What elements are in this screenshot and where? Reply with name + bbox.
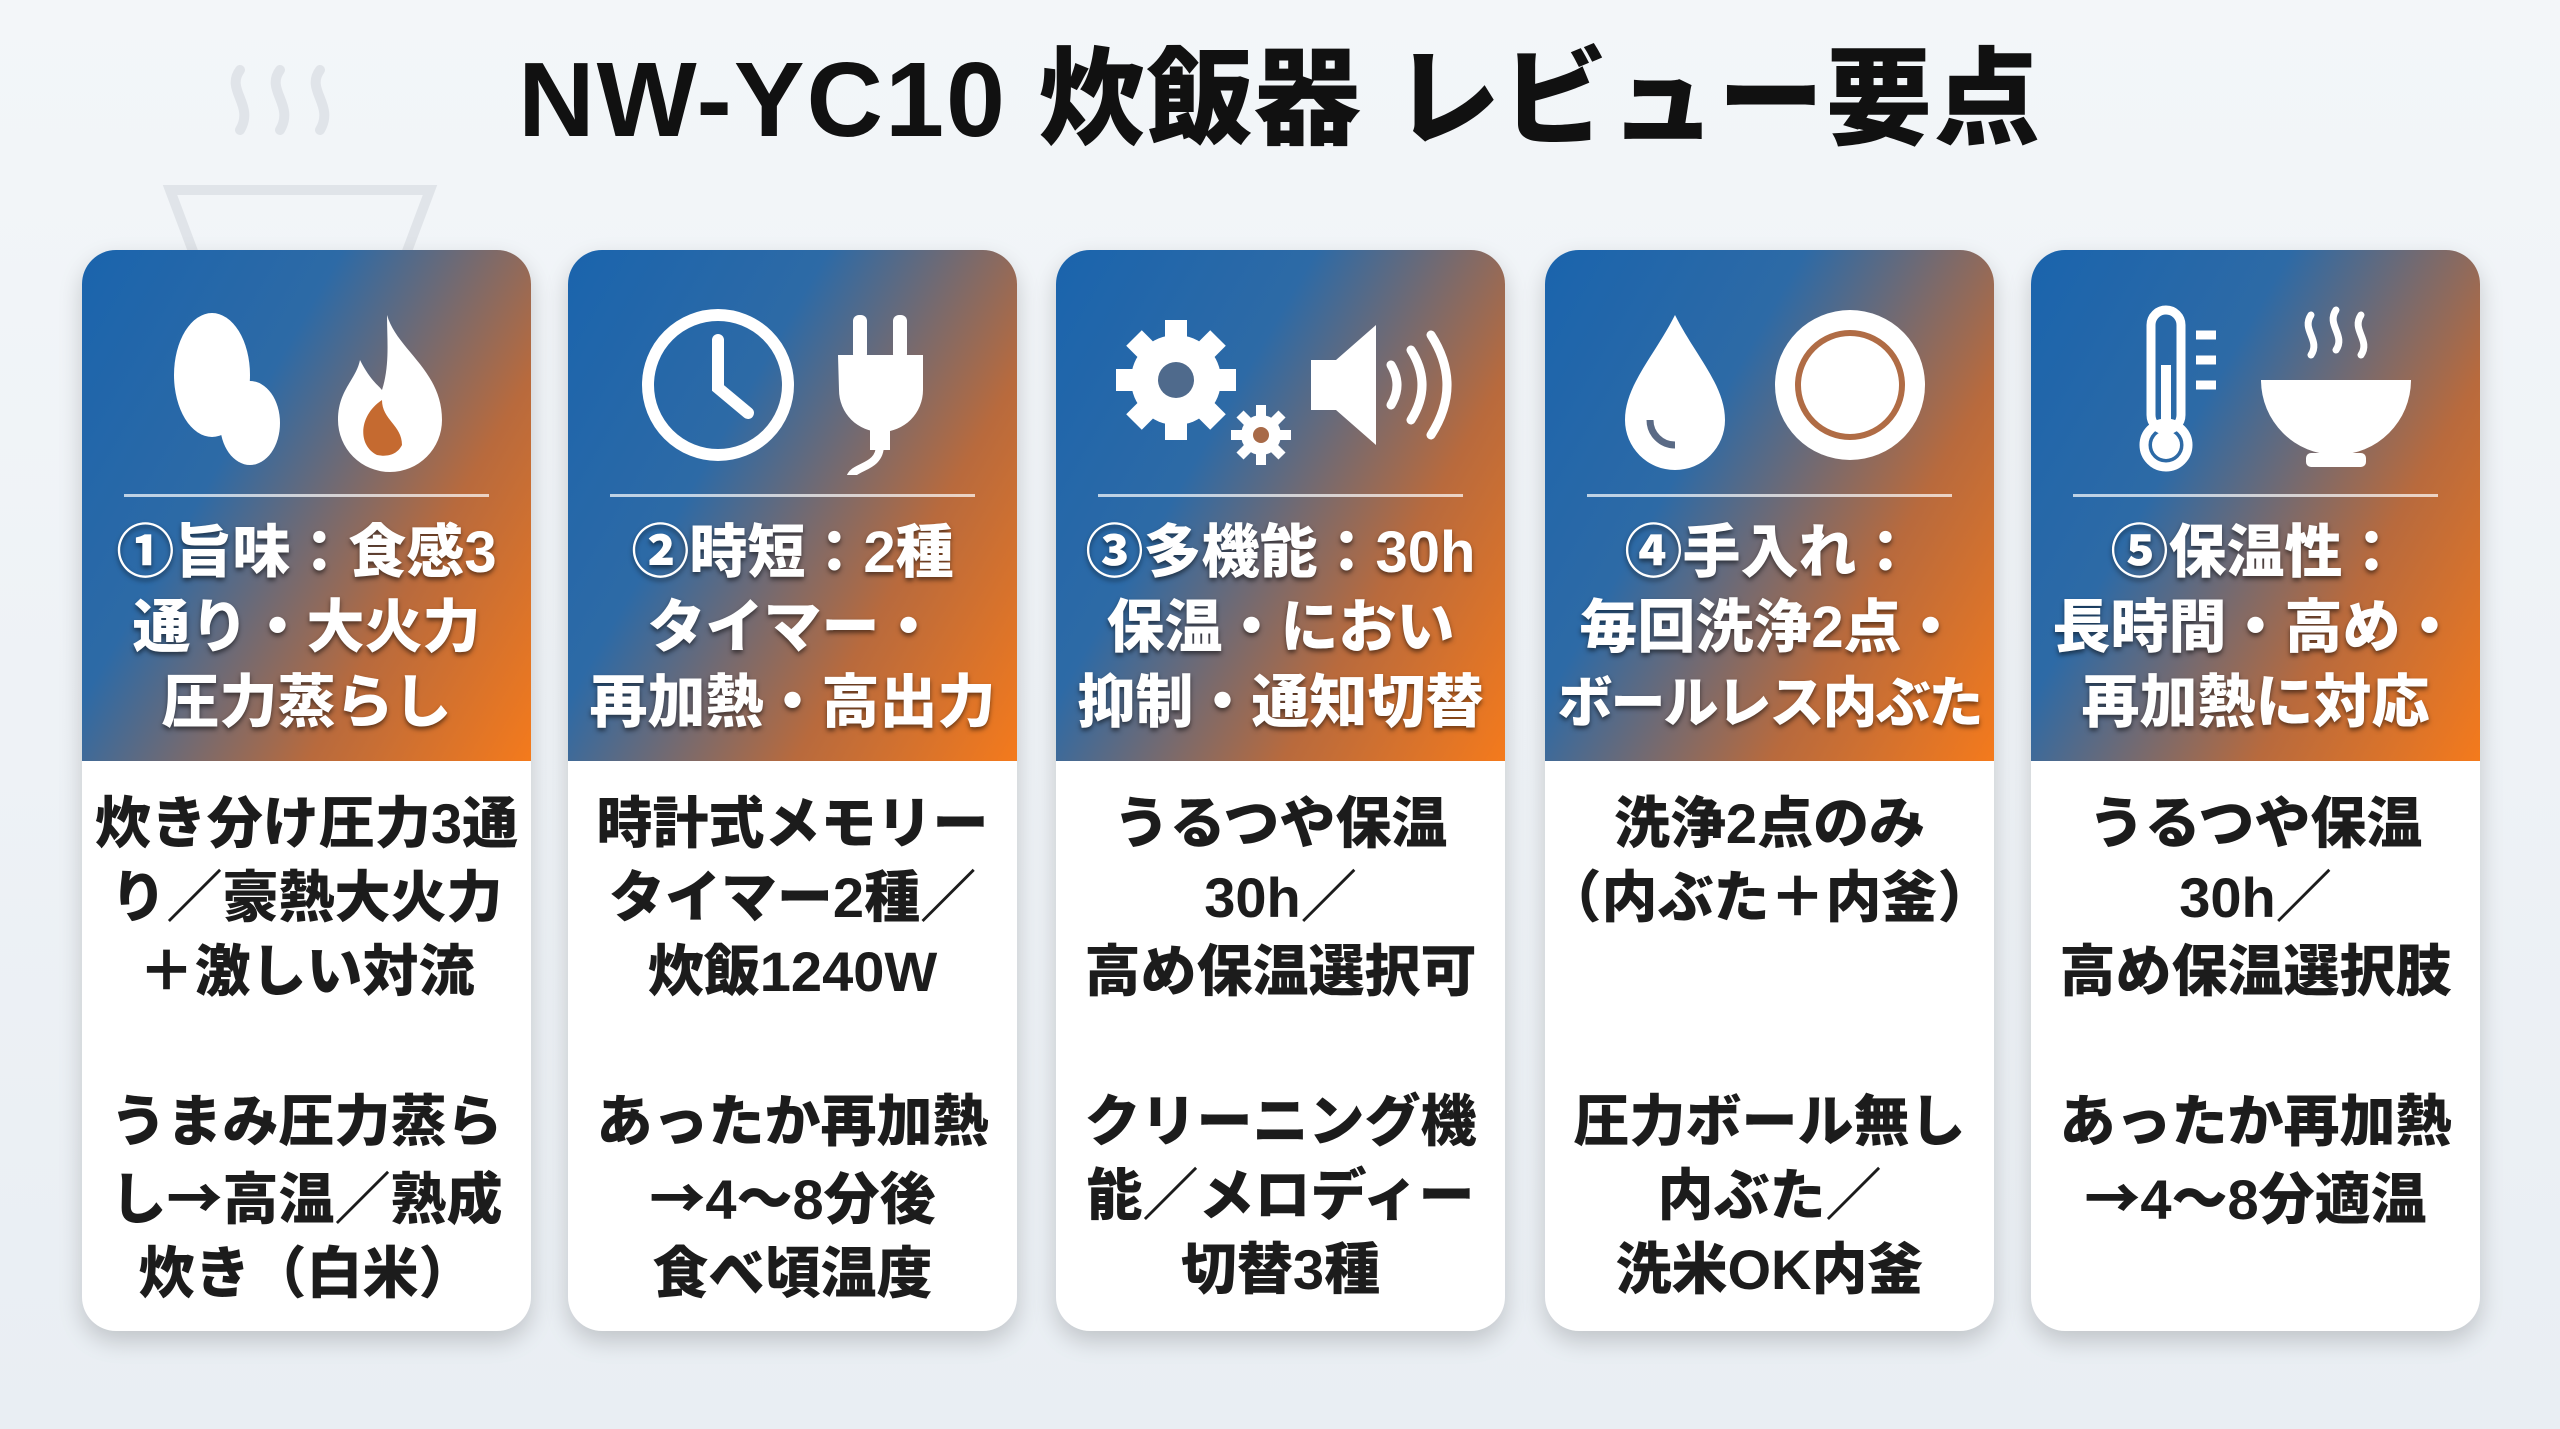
body text: うるつや保温 xyxy=(2089,792,2422,855)
body text: ＋激しい対流 xyxy=(138,940,474,1003)
body text: うるつや保温 xyxy=(1114,792,1447,855)
panel: card 2 xyxy=(568,250,1017,1331)
panel: card 3: 能／メロディー xyxy=(1086,1164,1475,1227)
header text xyxy=(115,520,498,735)
panel: card 2: あったか再加熱 xyxy=(596,1090,988,1153)
panel: card 5: →4〜8分適温 xyxy=(2084,1155,2427,1236)
panel: card 1: うまみ圧力蒸ら xyxy=(110,1090,502,1153)
panel: card 4: 圧力ボール無し xyxy=(1574,1090,1966,1153)
header text xyxy=(2052,520,2458,735)
panel: card 3: 切替3種 xyxy=(1181,1238,1380,1301)
body text xyxy=(1084,792,1476,1003)
panel: card 1: 炊き（白米） xyxy=(138,1242,474,1305)
header text: ④手入れ： xyxy=(1624,520,1914,585)
header text: ③多機能：30h xyxy=(1086,520,1475,585)
header text: 保温・におい xyxy=(1106,595,1454,660)
body text: 30h／ xyxy=(1204,866,1357,929)
icon: thermometer and bowl xyxy=(2140,306,2411,472)
icon: rice grains and flame xyxy=(174,313,442,472)
panel: card 4: 内ぶた／ xyxy=(1658,1164,1882,1227)
header text xyxy=(588,520,996,735)
icon: clock and plug xyxy=(642,309,923,475)
header text: 圧力蒸らし xyxy=(161,670,452,735)
panel: card 4: 洗米OK内釜 xyxy=(1616,1238,1924,1301)
panel: card 2: →4〜8分後 xyxy=(649,1155,936,1236)
icon: gears and speaker xyxy=(1116,320,1452,465)
body text: （内ぶた＋内釜） xyxy=(1546,866,1994,929)
body text xyxy=(95,792,518,1003)
body text: 30h／ xyxy=(2179,866,2332,929)
header text: 毎回洗浄2点・ xyxy=(1579,595,1960,660)
body text: り／豪熱大火力 xyxy=(110,866,502,929)
panel: card 1 xyxy=(82,250,531,1331)
background decoration: steam bowl xyxy=(163,65,437,250)
body text xyxy=(1546,792,1994,929)
body text: 炊き分け圧力3通 xyxy=(95,792,518,855)
header text: ボールレス内ぶた xyxy=(1557,672,1982,734)
body text xyxy=(2060,792,2452,1003)
body text: 洗浄2点のみ xyxy=(1614,792,1925,855)
panel: card 1: し→高温／熟成 xyxy=(110,1155,502,1236)
body text: 時計式メモリー xyxy=(596,792,988,855)
icon: water drop and plate xyxy=(1625,310,1925,470)
header text: 通り・大火力 xyxy=(132,595,480,660)
body text xyxy=(596,792,988,1003)
title: NW-YC10 炊飯器 レビュー要点 xyxy=(518,41,2042,159)
panel: card 2: 食べ頃温度 xyxy=(652,1242,932,1305)
header text: 再加熱・高出力 xyxy=(589,670,996,735)
body text: 高め保温選択可 xyxy=(1084,940,1476,1003)
header text: ①旨味：食感3 xyxy=(116,520,497,585)
panel: card 3: クリーニング機 xyxy=(1084,1090,1476,1153)
panel: card 3 xyxy=(1056,250,1505,1331)
panel: card 5: あったか再加熱 xyxy=(2060,1090,2452,1153)
header text: ②時短：2種 xyxy=(631,520,954,585)
body text: タイマー2種／ xyxy=(609,866,976,929)
header text: 抑制・通知切替 xyxy=(1077,670,1484,735)
header text xyxy=(1557,520,1982,734)
header text: 長時間・高め・ xyxy=(2052,595,2458,660)
header text xyxy=(1076,520,1484,735)
body text: 高め保温選択肢 xyxy=(2060,940,2452,1003)
header text: ⑤保温性： xyxy=(2110,520,2400,585)
header text: 再加熱に対応 xyxy=(2081,670,2430,735)
header text: タイマー・ xyxy=(647,595,938,660)
panel: card 5 xyxy=(2031,250,2480,1331)
body text: 炊飯1240W xyxy=(648,940,937,1003)
panel: card 4 xyxy=(1545,250,1994,1331)
